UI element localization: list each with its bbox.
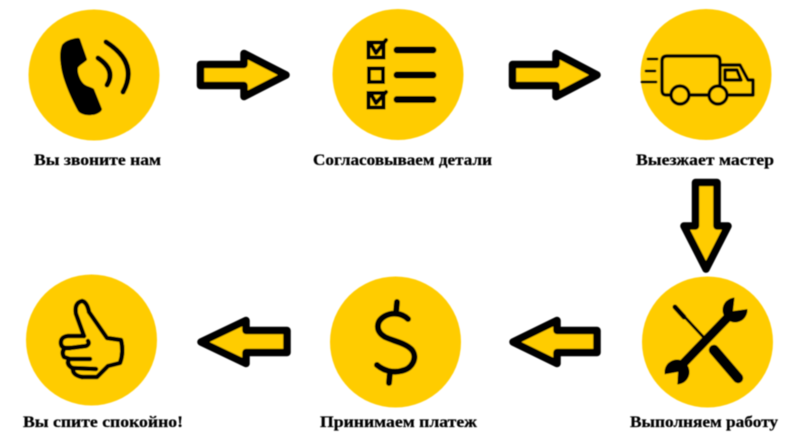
step 2: details [313,9,492,169]
circle [642,276,773,408]
arrow: right 2 [512,54,597,96]
icon: phone [60,38,128,115]
arrow: left 2 [201,320,287,364]
label: Принимаем платеж [320,414,477,431]
circle [640,9,772,140]
circle [26,274,157,406]
arrow: left 1 [513,320,597,364]
label: Вы спите спокойно! [23,414,183,431]
arrow: right 1 [200,54,286,96]
step 1: call [28,10,161,169]
circle [332,9,464,140]
circle [28,10,160,140]
label: Выполняем работу [630,414,778,431]
label: Согласовываем детали [313,152,492,169]
icon: checklist [368,40,433,108]
icon: tools [661,294,755,390]
step 3: master [636,9,774,169]
step 5: payment [320,276,477,431]
arrow: down [684,182,728,269]
step 4: work [630,276,778,431]
icon: dollar [377,302,414,383]
label: Вы звоните нам [34,152,161,169]
label: Выезжает мастер [636,152,774,169]
step 6: relax [23,274,183,431]
icon: thumbs up [61,301,122,377]
circle [330,276,461,408]
icon: truck [642,56,753,104]
